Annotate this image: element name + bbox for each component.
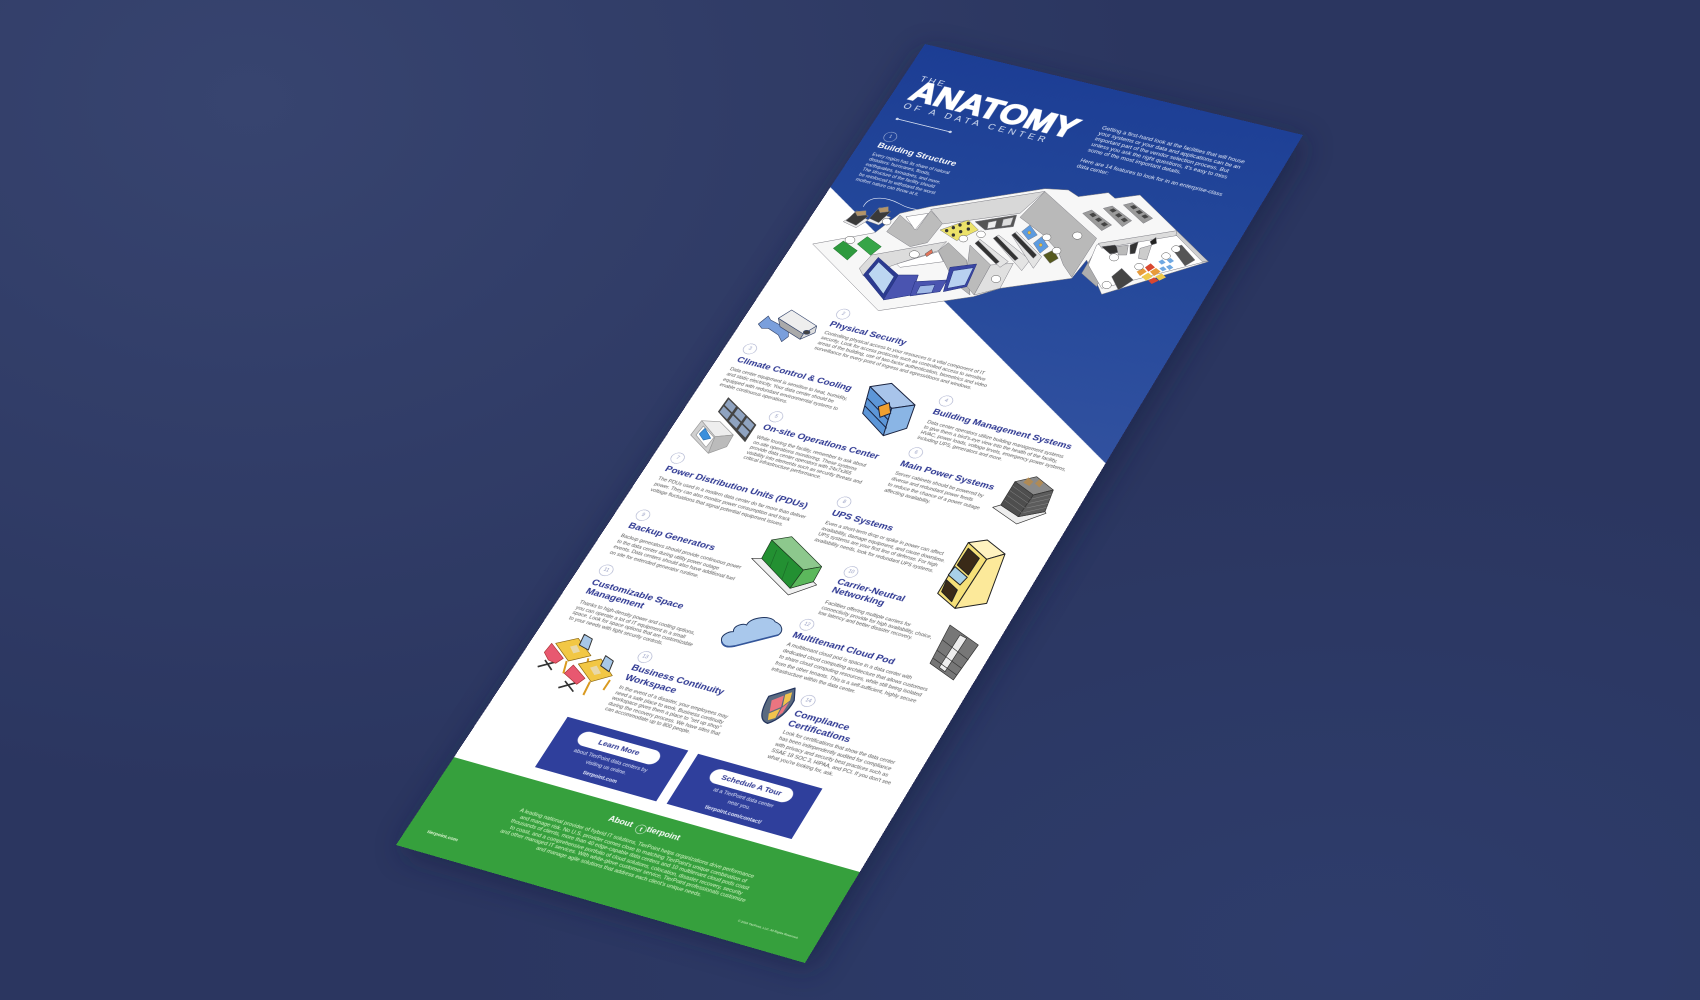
item 9: backup generators: Backup generators should provide continuous power (619, 533, 743, 570)
copyright: © 2019 TierPoint, LLC. All Rights Reserved. (737, 920, 799, 940)
item 11: customizable space: Thanks to high-density power and cooling options, (578, 599, 697, 636)
item 5: on-site operations: on-site operations monitoring. These systems (752, 440, 858, 472)
right gray wall (1020, 192, 1097, 277)
back wall and left room (887, 191, 1045, 247)
icon: security camera (758, 310, 817, 342)
item 10: carrier-neutral: low latency and better disaster recovery. (817, 610, 914, 641)
call to action: schedule a tour: at a TierPoint data center (712, 787, 775, 809)
item 3: climate control: Climate Control & Cooling (735, 355, 854, 393)
operations room screens (863, 257, 977, 300)
item 8: UPS: availability needs, look for redundant UPS systems. (813, 537, 935, 574)
cooling units (1022, 225, 1058, 263)
item 13: business continuity: need a safe place to work. Business continuity (614, 690, 725, 725)
item 5: on-site operations: While touring the facility, remember to ask about (755, 435, 867, 468)
item 9: backup generators (609, 510, 743, 582)
item 14: compliance: Certifications (786, 719, 853, 745)
item 13: business continuity: 13 (641, 654, 649, 660)
item 4: building management: 4 (943, 398, 949, 403)
item 9: backup generators: to the data center during utility power outage (616, 538, 721, 571)
item 14: compliance: SSAE 18 SOC 3, HIPAA, and PCI. If you don't see (770, 748, 893, 786)
item 11: customizable space: Customizable Space (589, 578, 686, 611)
item 11: customizable space: to your needs with tight security controls. (568, 615, 665, 646)
item 5: on-site operations: provide data center operators with 24x7x365 (749, 445, 853, 476)
item 2: physical security: Physical Security (828, 320, 909, 347)
item 1: building structure: Building Structure (875, 141, 959, 168)
item 8: UPS: UPS Systems (830, 508, 895, 533)
item 12: multitenant cloud pod: to share cloud computing resources, while still being isolated (778, 654, 923, 698)
icon: UPS cabinet (938, 540, 1005, 608)
blue header background (830, 44, 1303, 464)
item 1: building structure: Every region has its share of natural (871, 152, 951, 175)
call to action: learn more: tierpoint.com (581, 770, 618, 785)
item 4: building management: including UPS, generators and more. (916, 435, 1004, 462)
about paragraph: and other managed IT services. With white-glove customer service, TierPoint professionals customize (499, 828, 747, 904)
intro text: important part of the vendor selection process. But (1094, 136, 1230, 174)
intro text: Here are 14 features to look for in an enterprise-class (1079, 157, 1224, 197)
icon: operations center (691, 398, 756, 453)
intro text: some of the most important details. (1087, 147, 1183, 175)
item 8: UPS: 8 (841, 499, 847, 505)
call to action: learn more (535, 717, 688, 801)
item 5: on-site operations: visibility into elements such as security threats and (745, 450, 863, 485)
item 3: climate control: enable continuous operations. (718, 382, 789, 404)
icon: workspace desks (538, 634, 613, 695)
item 14: compliance (766, 694, 896, 786)
item 9: backup generators: Backup Generators (626, 521, 718, 553)
website link: tierpoint.com (426, 829, 459, 843)
about heading and logo: About tierpoint (607, 815, 682, 842)
item 11: customizable space: space. Look for space options that are customizable (571, 610, 694, 648)
item 6: main power: 6 (913, 450, 919, 455)
item 2: physical security: Controlling physical access to your resources is a vital component of IT (823, 330, 986, 376)
dark top racks (975, 215, 1017, 230)
item 13: business continuity: Workspace (623, 673, 679, 695)
item 3: climate control: 3 (747, 346, 753, 351)
item 4: building management: HVAC, power loads, voltage levels, emergency power systems, (919, 430, 1067, 472)
item 6: main power: Main Power Systems (898, 459, 997, 492)
item 5: on-site operations: On-site Operations Center (761, 423, 881, 461)
about paragraph: and manage risk. No U.S. provider comes close to matching TierPoint's unique combination of (519, 814, 748, 884)
item 10: carrier-neutral: connectivity provide for high availability, choice, (820, 605, 934, 640)
about paragraph: and manage agile solutions that address each client's unique needs. (535, 845, 703, 898)
about paragraph: A leading national provider of hybrid IT solutions, TierPoint helps organizations drive performance (518, 808, 756, 879)
item 1: building structure: be reinforced to withstand the worst (858, 172, 936, 195)
call to action: learn more: visiting us online. (584, 759, 628, 776)
item 8: UPS: UPS systems are your first line of defense. For high (817, 531, 939, 568)
item 7: PDUs: voltage fluctuations that signal potential equipment issues. (649, 487, 785, 527)
item 12: multitenant cloud pod: infrastructure within the data center. (770, 666, 857, 694)
item 1: building structure: 1 (888, 134, 893, 139)
item 10: carrier-neutral: Carrier-Neutral (835, 577, 907, 604)
item 2: physical security (813, 308, 988, 391)
item 8: UPS: Even a short-term drop or spike in power can affect (824, 520, 945, 556)
item 11: customizable space: Management (584, 586, 646, 611)
item 3: climate control: equipped with redundant environmental systems to (722, 377, 839, 411)
item 9: backup generators: 9 (640, 512, 646, 518)
yellow tile area (940, 220, 978, 241)
item 13: business continuity: workspace gives them a place to "set up shop" (611, 695, 723, 731)
icon: cloud (721, 618, 782, 647)
item 3: climate control (718, 344, 854, 411)
about heading and logo: t (638, 825, 644, 833)
call to action: schedule a tour: tierpoint.com/contact/ (703, 804, 763, 825)
call to action: schedule a tour: Schedule A Tour (719, 773, 784, 798)
green generators (833, 237, 881, 260)
item 4: building management: Data center operators utilize building management systems (926, 419, 1065, 459)
icon: backup generator (752, 537, 822, 595)
item 1: building structure (855, 132, 959, 197)
item 10: carrier-neutral: Networking (830, 585, 887, 608)
item 5: on-site operations: critical infrastructure performance. (742, 455, 823, 480)
item 12: multitenant cloud pod: A multitenant cloud pod is space in a data center with (786, 642, 913, 681)
item 12: multitenant cloud pod: from the other tenants. This is a self-sufficient, highly secure (774, 660, 918, 704)
item 9: backup generators: on site for extended generator runtime. (609, 550, 700, 579)
about paragraph: to coast, and a comprehensive portfolio of cloud solutions, colocation, disaster recovery, security (509, 825, 744, 896)
intro text: data center: (1076, 163, 1110, 176)
icon: main power rack (993, 477, 1053, 524)
item 2: physical security: areas of the building, use of two-factor authentication, biometrics and video (816, 340, 988, 388)
item 1: building structure: disasters: hurricanes, floods, (868, 157, 931, 176)
item 14: compliance: Look for certifications that show the data center (781, 729, 896, 766)
item 1: building structure: mother nature can throw at it. (855, 177, 920, 197)
title: ANATOMY (904, 76, 1086, 144)
item 6: main power: Server cabinets should be powered by (894, 470, 985, 499)
footer band (396, 757, 860, 963)
item 14: compliance: what you're looking for, ask. (766, 754, 835, 777)
item 4: building management: to give them a bird's-eye view into the health of the facility, (923, 425, 1059, 464)
item 1: building structure: The structure of the facility should (861, 167, 936, 189)
item 11: customizable space: you can operate a lot of IT equipment in a small (575, 605, 687, 639)
item 12: multitenant cloud pod: 12 (803, 621, 811, 628)
item 13: business continuity: Business Continuity (629, 663, 726, 697)
callout number markers (845, 218, 1180, 289)
item 12: multitenant cloud pod: Multitenant Cloud Pod (790, 630, 897, 667)
item 1: building structure: earthquakes, tornadoes, and more. (864, 162, 942, 185)
item 7: PDUs: The PDUs used in a modern data center do far more than deliver (657, 476, 807, 520)
item 2: physical security: surveillance for every point of ingress and egress/doors and windows. (813, 345, 973, 391)
item 5: on-site operations: 5 (773, 414, 779, 419)
right wing racks (1083, 203, 1153, 231)
call to action: schedule a tour: near you. (726, 799, 752, 811)
item 10: carrier-neutral: 10 (847, 569, 855, 575)
about paragraph: thousands of clients, more than 40 edge-capable data centers and 10 multitenant cloud pods coast (509, 818, 750, 891)
item 14: compliance: with privacy and security best practices such as (774, 742, 890, 778)
lower walls (859, 242, 1013, 295)
item 13: business continuity: can accommodate up to 800 people. (604, 706, 692, 735)
right wing rooms (1088, 231, 1208, 290)
item 2: physical security: security. Look for access protocols such as controlled access to sensitive (820, 335, 987, 382)
item 7: PDUs: 7 (675, 455, 681, 460)
item 5: on-site operations (742, 411, 881, 485)
item 3: climate control: Data center equipment is sensitive to heat, humidity, (729, 366, 849, 401)
item 10: carrier-neutral: Facilities offering multiple carriers for (824, 600, 912, 628)
intro text: Getting a first-hand look at the facilities that will house (1101, 125, 1246, 165)
call to action: schedule a tour (667, 754, 822, 839)
item 13: business continuity: during the recovery process. We have sites that (607, 701, 721, 737)
item 4: building management (916, 395, 1074, 472)
item 4: building management: Building Management Systems (931, 407, 1074, 451)
building cutaway illustration (813, 189, 1208, 311)
item 10: carrier-neutral (817, 566, 934, 641)
item 12: multitenant cloud pod (770, 618, 929, 704)
title: THE (918, 75, 949, 89)
icon: server pod (930, 625, 978, 680)
item 14: compliance: has been independently audited for compliance (778, 735, 893, 772)
item 14: compliance: 14 (804, 698, 813, 704)
item 6: main power: affecting availability. (883, 488, 932, 505)
item 12: multitenant cloud pod: dedicated cloud computing architecture that allows customers (782, 648, 929, 692)
item 3: climate control: and static electricity. Your data center should be (725, 372, 835, 404)
item 8: UPS (813, 496, 947, 574)
call to action: learn more: about TierPoint data centers by (572, 748, 649, 773)
item 6: main power: to reduce the chance of a power outage (887, 482, 981, 511)
external generators (843, 198, 925, 228)
intro text (1076, 125, 1246, 197)
call to action: learn more: Learn More (596, 738, 642, 757)
icon: compliance shield (762, 688, 795, 723)
item 7: PDUs: power. They can also monitor power consumption and track (653, 481, 791, 522)
item 14: compliance: Compliance (792, 709, 852, 733)
item 13: business continuity (604, 651, 729, 737)
item 2: physical security: 2 (841, 311, 846, 316)
item 8: UPS: availability, damage equipment, and cause downtime. (820, 526, 947, 564)
intro text: your systems or your data and applications can be an (1097, 130, 1242, 170)
intro text: unless you ask the right questions, it's easy to miss (1090, 142, 1229, 180)
infographic page (396, 44, 1303, 963)
item 7: PDUs: Power Distribution Units (PDUs) (663, 464, 810, 510)
icon: cooling unit (863, 383, 915, 436)
item 6: main power (883, 447, 997, 511)
floor plate (813, 189, 1208, 311)
item 9: backup generators: events. Data centers should also have additional fuel (612, 544, 736, 582)
server rows (975, 232, 1042, 271)
item 7: PDUs (649, 452, 810, 527)
item 13: business continuity: In the event of a disaster, your employees may (618, 684, 729, 720)
title: OF A DATA CENTER (901, 102, 1051, 145)
item 6: main power: diverse and redundant power feeds (890, 476, 974, 502)
item 11: customizable space (568, 564, 697, 648)
item 11: customizable space: 11 (602, 567, 610, 573)
